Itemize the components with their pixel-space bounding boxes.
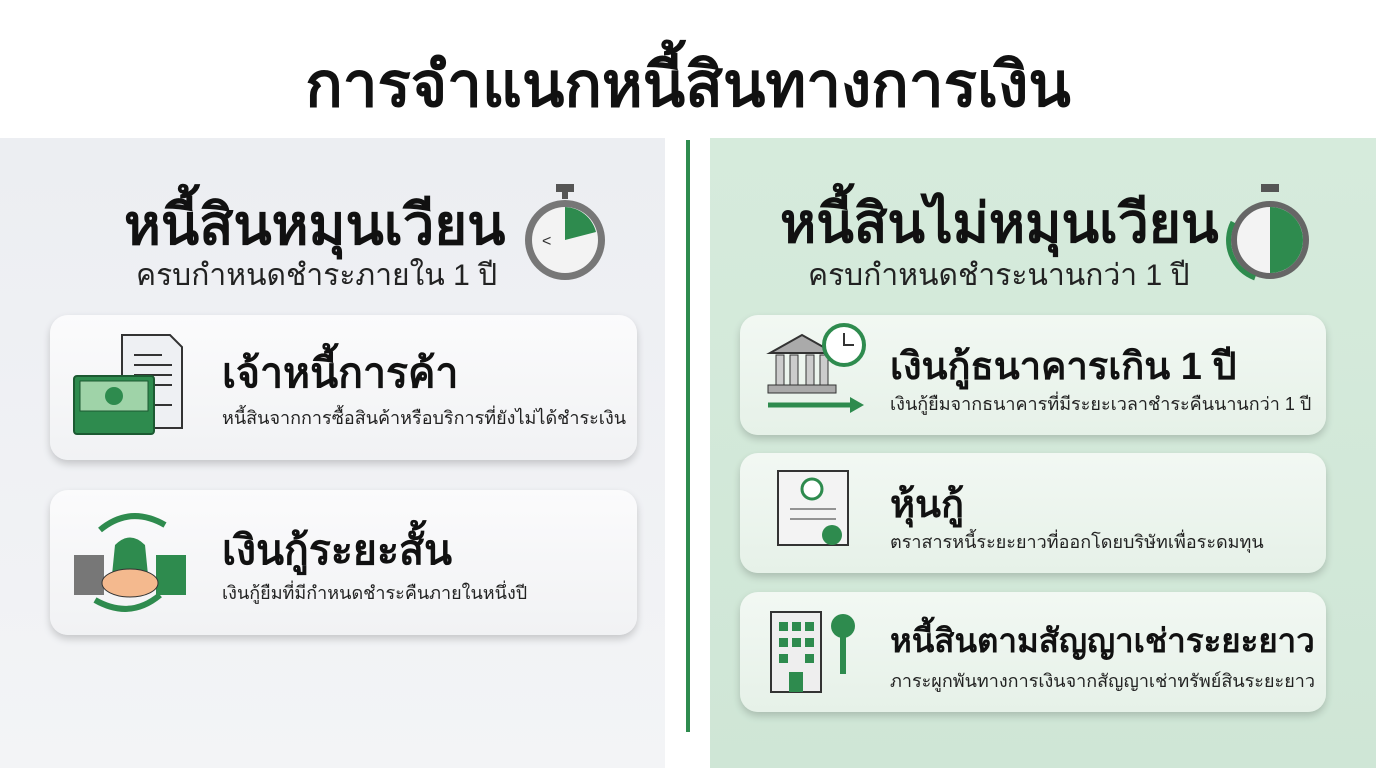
icon: money and document — [73, 334, 183, 435]
card: debentures — [740, 453, 1326, 573]
icon: building and key — [770, 611, 855, 693]
desc: หนี้สินจากการซื้อสินค้าหรือบริการที่ยังไม่ได้ชำระเงิน — [222, 408, 626, 428]
title: เงินกู้ระยะสั้น — [222, 527, 452, 573]
title: หุ้นกู้ — [890, 484, 964, 526]
heading: current: หนี้สินหมุนเวียน — [124, 193, 505, 256]
card: trade payables — [50, 315, 637, 460]
panel: non-current liabilities — [710, 138, 1376, 768]
icon: stopwatch: < — [542, 233, 551, 250]
icon: handshake — [74, 513, 186, 612]
divider — [686, 140, 690, 732]
title: การจำแนกหนี้สินทางการเงิน — [305, 51, 1071, 120]
title: trade payables: เจ้าหนี้การค้า — [222, 350, 458, 396]
icon: certificate — [777, 470, 849, 546]
desc: ตราสารหนี้ระยะยาวที่ออกโดยบริษัทเพื่อระดมทุน — [890, 532, 1264, 552]
panel: current liabilities — [0, 138, 665, 768]
title: หนี้สินตามสัญญาเช่าระยะยาว — [890, 622, 1315, 659]
desc: เงินกู้ยืมที่มีกำหนดชำระคืนภายในหนึ่งปี — [222, 583, 527, 603]
title: เงินกู้ธนาคารเกิน 1 ปี — [890, 346, 1237, 388]
heading: non-current: หนี้สินไม่หมุนเวียน — [780, 192, 1219, 254]
icon: cycle stopwatch — [1226, 184, 1309, 280]
icon: bank with clock — [766, 323, 866, 413]
icon: stopwatch — [525, 184, 605, 280]
card: short-term loans — [50, 490, 637, 635]
subtitle: current: ครบกำหนดชำระภายใน 1 ปี — [136, 259, 497, 292]
card: long-term leases — [740, 592, 1326, 712]
desc: เงินกู้ยืมจากธนาคารที่มีระยะเวลาชำระคืนนานกว่า 1 ปี — [890, 394, 1311, 414]
desc: ภาระผูกพันทางการเงินจากสัญญาเช่าทรัพย์สินระยะยาว — [890, 671, 1315, 691]
card: bank loans — [740, 315, 1326, 435]
subtitle: ครบกำหนดชำระนานกว่า 1 ปี — [808, 259, 1190, 292]
